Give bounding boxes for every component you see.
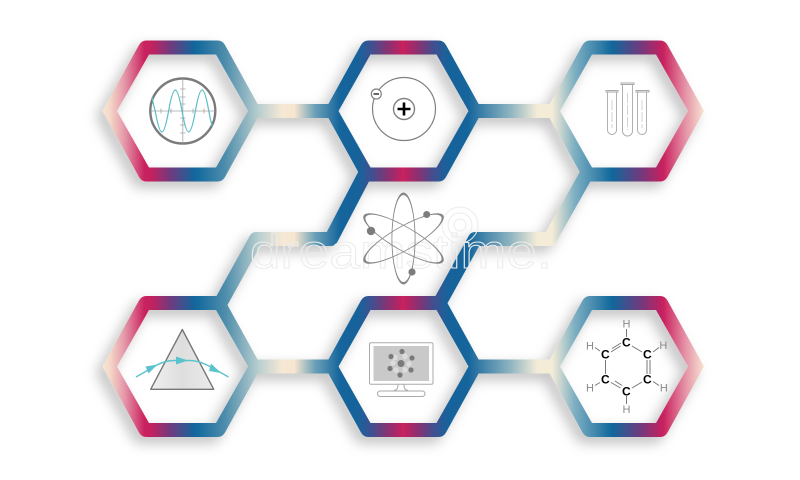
icon: benzene molecule: C <box>622 384 631 398</box>
icon: benzene molecule: H <box>623 404 631 416</box>
icon: benzene molecule <box>586 318 668 416</box>
icon: hydrogen atom <box>371 78 436 140</box>
arrowhead: entering ray <box>146 364 158 374</box>
connector: top row right <box>470 104 556 118</box>
connector: top row left <box>250 104 335 118</box>
connector: top-right hexagon to bottom-centre hexagon <box>438 175 586 305</box>
watermark <box>250 207 552 279</box>
connector: bottom row left <box>250 360 335 374</box>
icon: prism <box>136 330 228 389</box>
hexagon: top left <box>102 40 262 182</box>
icon: oscilloscope <box>150 78 215 144</box>
hexagon: bottom right <box>546 296 704 437</box>
icon: benzene molecule: C <box>601 348 610 362</box>
icon: benzene molecule: H <box>623 318 631 330</box>
icon: benzene molecule: C <box>622 336 631 350</box>
watermark: dreamstime. <box>250 226 552 279</box>
icon: benzene molecule: H <box>586 382 594 394</box>
hexagon: top centre <box>324 40 482 182</box>
icon: benzene molecule: H <box>586 340 594 352</box>
hexagon: bottom left <box>102 296 262 437</box>
icon: benzene molecule: C <box>643 348 652 362</box>
icon: benzene molecule: C <box>643 372 652 386</box>
icon: atom with three orbits <box>358 192 449 284</box>
arrowhead: exiting ray <box>209 364 221 373</box>
hexagon: top right <box>546 40 704 182</box>
icon: benzene molecule: H <box>659 340 667 352</box>
icon: benzene molecule: C <box>601 372 610 386</box>
arrowhead: inside prism <box>176 356 188 364</box>
icon: benzene molecule: H <box>660 382 668 394</box>
hexagon: bottom centre <box>324 296 482 437</box>
connector: bottom row right <box>470 360 556 374</box>
hexagon network <box>102 40 704 437</box>
connector: centre-top hexagon to bottom-left hexagon <box>220 174 365 305</box>
icon: test tubes <box>606 83 649 136</box>
icon: computer monitor with molecule <box>370 343 433 396</box>
